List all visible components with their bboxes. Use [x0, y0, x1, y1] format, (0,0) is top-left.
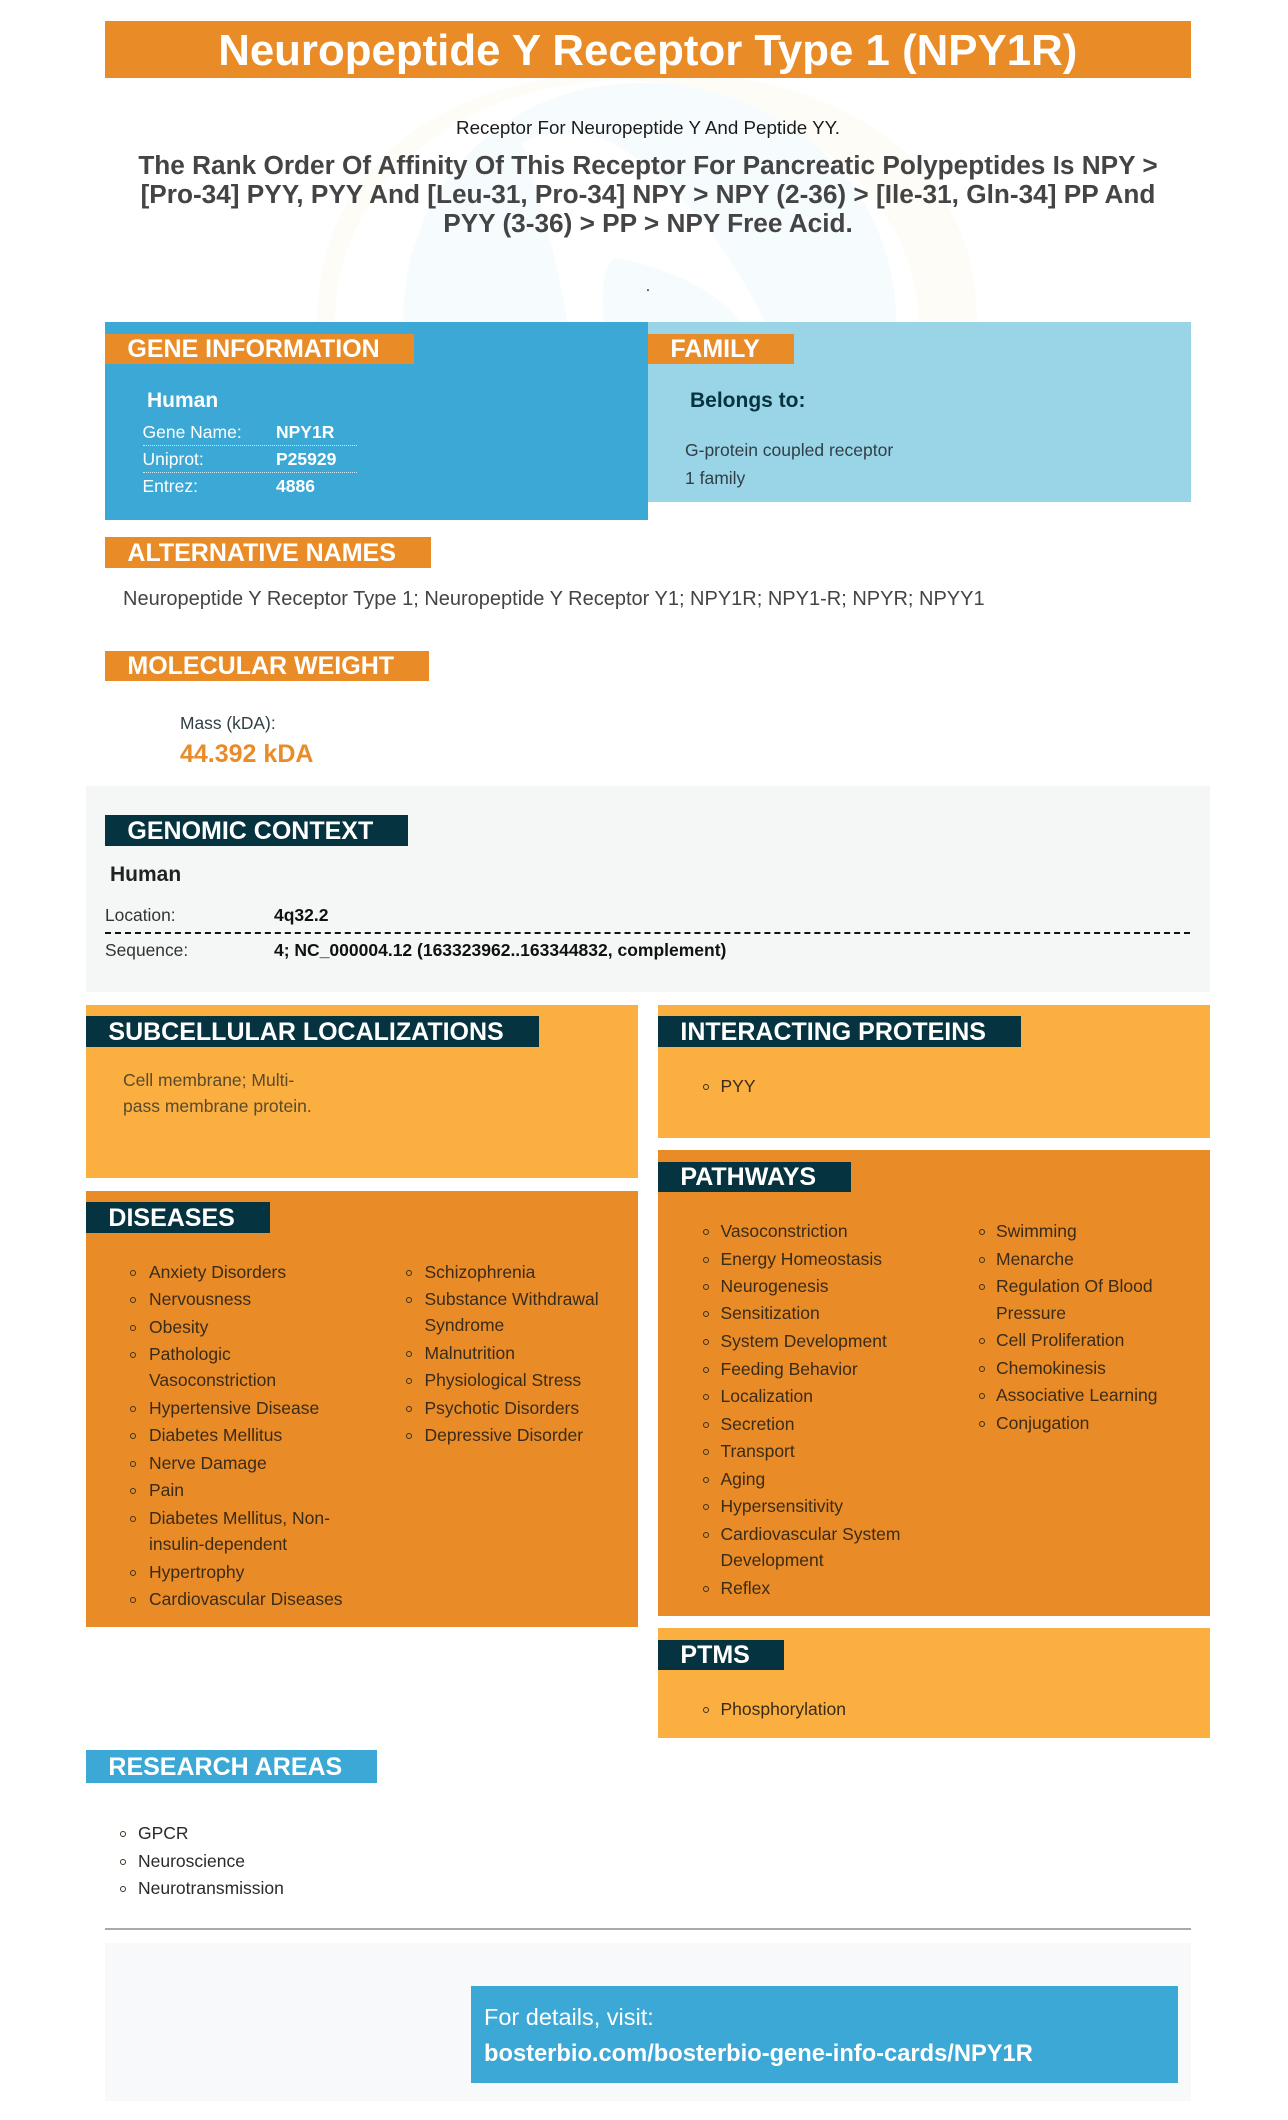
heading: pathways	[658, 1162, 851, 1192]
panel: subcellular localizations	[86, 1005, 638, 1178]
diseases list column 1: Nervousness	[149, 1289, 251, 1309]
gene name row: NPY1R	[276, 422, 334, 442]
pathways list column 2: Pressure	[996, 1303, 1066, 1323]
location row: Location:	[105, 905, 176, 925]
heading: gene information: GENE INFORMATION	[127, 335, 380, 363]
intro function description: The Rank Order Of Affinity Of This Receptor For Pancreatic Polypeptides Is NPY >	[138, 150, 1158, 180]
pathways list column 1: System Development	[720, 1331, 887, 1351]
pathways list column 2: Associative Learning	[996, 1385, 1157, 1405]
pathways list column 1	[703, 1221, 900, 1598]
entrez row	[142, 476, 315, 496]
diseases list column 1: Hypertrophy	[149, 1562, 244, 1582]
heading: molecular weight: MOLECULAR WEIGHT	[127, 652, 394, 680]
diseases list column 1: Pain	[149, 1480, 184, 1500]
gene name row	[142, 416, 357, 446]
diseases list column 2: Malnutrition	[424, 1343, 515, 1363]
pathways list column 1: Cardiovascular System	[720, 1524, 900, 1544]
family description: G-protein coupled receptor	[685, 440, 893, 460]
diseases list column 2: Psychotic Disorders	[424, 1398, 579, 1418]
heading: family: FAMILY	[670, 335, 760, 363]
diseases list column 1: Vasoconstriction	[149, 1370, 276, 1390]
intro function description: PYY (3-36) > PP > NPY Free Acid.	[443, 208, 853, 238]
pathways list column 1: Transport	[720, 1441, 795, 1461]
pathways list column 2: Conjugation	[996, 1413, 1089, 1433]
diseases list column 1: Obesity	[149, 1317, 208, 1337]
pathways list column 1: Aging	[720, 1469, 765, 1489]
heading: diseases	[86, 1202, 270, 1233]
diseases list column 2: Schizophrenia	[424, 1262, 535, 1282]
research areas list: Neurotransmission	[138, 1878, 284, 1898]
mass label: Mass (kDA):	[180, 713, 276, 733]
ptms list: Phosphorylation	[720, 1699, 846, 1719]
panel: interacting proteins	[658, 1005, 1210, 1138]
sequence row: Sequence:	[105, 940, 188, 960]
panel: family	[648, 322, 1190, 502]
research areas list	[120, 1823, 284, 1898]
callout label: For details, visit:	[484, 2004, 654, 2030]
heading: research areas: RESEARCH AREAS	[108, 1753, 342, 1781]
panel: genomic context	[86, 786, 1210, 992]
localization text: pass membrane protein.	[123, 1096, 312, 1116]
alternative names text: Neuropeptide Y Receptor Type 1; Neuropeptide Y Receptor Y1; NPY1R; NPY1-R; NPYR; NPYY1	[123, 588, 985, 610]
diseases list column 1: Diabetes Mellitus	[149, 1425, 282, 1445]
intro dot: .	[646, 278, 650, 295]
heading: pathways: PATHWAYS	[680, 1163, 816, 1191]
background watermark logo	[317, 78, 977, 322]
diseases list column 1	[130, 1262, 343, 1609]
intro function description: [Pro-34] PYY, PYY And [Leu-31, Pro-34] NPY > NPY (2-36) > [Ile-31, Gln-34] PP And	[141, 179, 1155, 209]
heading: genomic context: GENOMIC CONTEXT	[127, 817, 373, 845]
title banner	[105, 21, 1190, 78]
title banner: Neuropeptide Y Receptor Type 1 (NPY1R)	[218, 26, 1077, 75]
pathways list column 1: Development	[720, 1550, 824, 1570]
pathways list column 1: Feeding Behavior	[720, 1359, 858, 1379]
panel: diseases	[86, 1191, 638, 1627]
pathways list column 2: Cell Proliferation	[996, 1330, 1124, 1350]
uniprot row: Uniprot:	[142, 449, 204, 469]
belongs to label: Belongs to:	[690, 389, 806, 412]
diseases list column 2: Physiological Stress	[424, 1370, 581, 1390]
localization text: Cell membrane; Multi-	[123, 1070, 294, 1090]
pathways list column 1: Energy Homeostasis	[720, 1249, 882, 1269]
diseases list column 1: Pathologic	[149, 1344, 231, 1364]
diseases list column 1: Nerve Damage	[149, 1453, 267, 1473]
heading: alternative names: ALTERNATIVE NAMES	[127, 539, 396, 567]
heading: research areas	[86, 1750, 377, 1783]
heading: diseases: DISEASES	[108, 1204, 235, 1232]
heading: interacting proteins: INTERACTING PROTEINS	[680, 1018, 986, 1046]
intro subtitle: Receptor For Neuropeptide Y And Peptide YY.	[456, 117, 840, 138]
pathways list column 1: Sensitization	[720, 1303, 820, 1323]
diseases list column 2: Syndrome	[424, 1315, 504, 1335]
panel: footer	[105, 1943, 1190, 2101]
diseases list column 1: Cardiovascular Diseases	[149, 1589, 343, 1609]
pathways list column 1: Neurogenesis	[720, 1276, 828, 1296]
intro function description	[138, 150, 1158, 238]
research areas list: Neuroscience	[138, 1851, 245, 1871]
pathways list column 1: Vasoconstriction	[720, 1221, 848, 1241]
pathways list column 1: Localization	[720, 1386, 813, 1406]
family description second line: 1 family	[685, 468, 745, 488]
species label: Human	[110, 863, 181, 886]
uniprot row	[142, 444, 357, 473]
pathways list column 2: Regulation Of Blood	[996, 1276, 1153, 1296]
pathways list column 2: Menarche	[996, 1249, 1074, 1269]
pathways list column 1: Hypersensitivity	[720, 1496, 843, 1516]
pathways list column 2: Swimming	[996, 1221, 1077, 1241]
localization text	[123, 1070, 312, 1116]
callout url: bosterbio.com/bosterbio-gene-info-cards/NPY1R	[484, 2040, 1033, 2066]
heading: subcellular localizations: SUBCELLULAR LOCALIZATIONS	[108, 1018, 504, 1046]
gene name row: Gene Name:	[142, 422, 242, 442]
entrez row: 4886	[276, 476, 315, 496]
panel: gene information	[105, 322, 648, 520]
diseases list column 1: Hypertensive Disease	[149, 1398, 319, 1418]
sequence row: 4; NC_000004.12 (163323962..163344832, complement)	[274, 940, 726, 960]
heading: ptms: PTMS	[680, 1641, 750, 1669]
diseases list column 1: insulin-dependent	[149, 1534, 287, 1554]
entrez row: Entrez:	[142, 476, 198, 496]
diseases list column 2	[406, 1262, 599, 1445]
mass value: 44.392 kDA	[180, 740, 313, 768]
pathways list column 2	[979, 1221, 1157, 1433]
uniprot row: P25929	[276, 449, 336, 469]
research areas list: GPCR	[138, 1823, 189, 1843]
interacting proteins list: PYY	[720, 1076, 756, 1096]
pathways list column 2: Chemokinesis	[996, 1358, 1106, 1378]
panel: pathways	[658, 1150, 1210, 1616]
pathways list column 1: Secretion	[720, 1414, 794, 1434]
heading: ptms	[658, 1640, 784, 1670]
diseases list column 1: Diabetes Mellitus, Non-	[149, 1508, 330, 1528]
diseases list column 2: Depressive Disorder	[424, 1425, 583, 1445]
panel: ptms	[658, 1628, 1210, 1738]
callout: details link	[471, 1986, 1178, 2083]
diseases list column 2: Substance Withdrawal	[424, 1289, 599, 1309]
location row	[105, 900, 1190, 934]
pathways list column 1: Reflex	[720, 1578, 770, 1598]
species label: Human	[147, 389, 218, 412]
diseases list column 1: Anxiety Disorders	[149, 1262, 286, 1282]
heading: family	[648, 334, 794, 364]
location row: 4q32.2	[274, 905, 328, 925]
